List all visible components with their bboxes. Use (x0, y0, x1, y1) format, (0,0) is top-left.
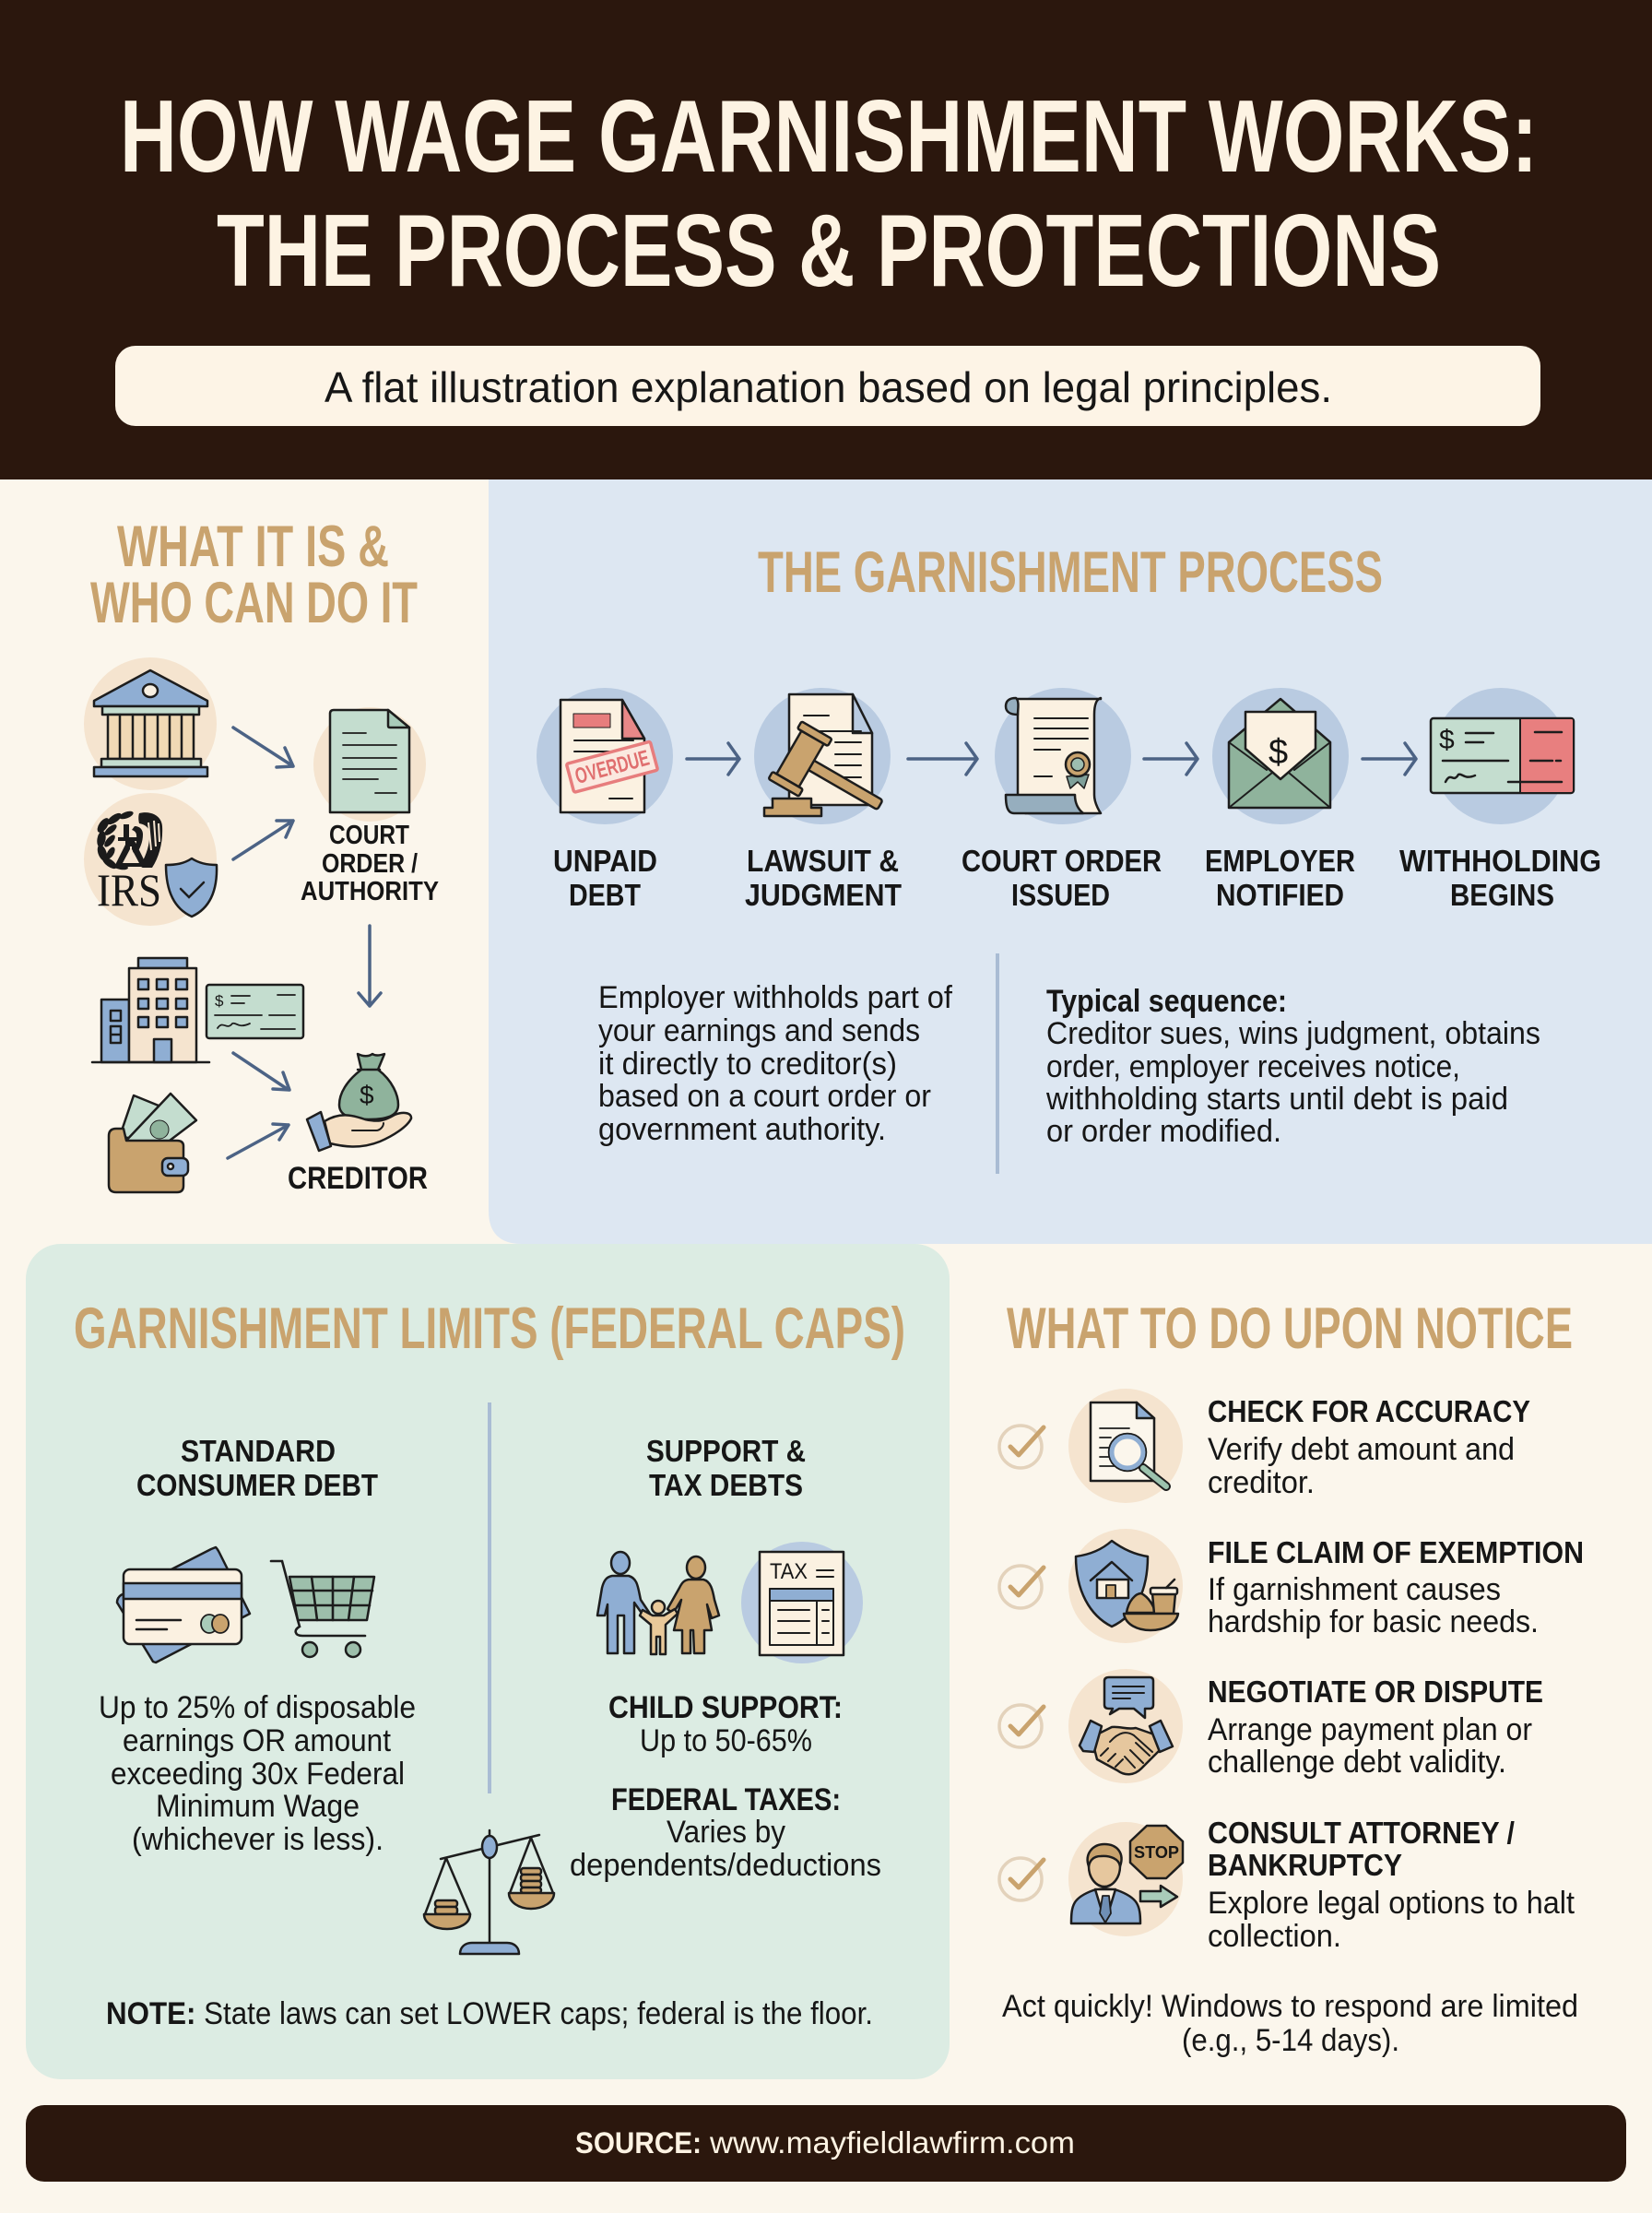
text: definition: Employer withholds part of (598, 980, 953, 1015)
icon: attorney with stop sign (1068, 1822, 1183, 1936)
icon: money bag in hand (307, 1054, 411, 1151)
label: court order / authority: AUTHORITY (301, 877, 439, 906)
icon: balance scale (424, 1830, 554, 1954)
label: court order / authority: COURT (329, 821, 409, 850)
text: child support: CHILD SUPPORT: (608, 1690, 843, 1725)
icon: IRS and shield: IRS (97, 864, 161, 916)
heading: what it is: WHO CAN DO IT (90, 571, 418, 635)
footer: source bar (26, 2105, 1626, 2182)
subtitle pill (115, 346, 1540, 426)
panel: garnishment limits (26, 1244, 950, 2079)
label: unpaid debt: DEBT (569, 878, 641, 912)
icon: paycheck withheld (1431, 688, 1574, 824)
label: unpaid debt: UNPAID (553, 844, 657, 878)
subtitle pill: A flat illustration explanation based on legal principles. (324, 363, 1332, 411)
label: support and tax debts: TAX DEBTS (649, 1468, 803, 1502)
text: check for accuracy: CHECK FOR ACCURACY (1208, 1394, 1530, 1428)
label: lawsuit and judgment: LAWSUIT & (747, 844, 899, 878)
icon: employer building (92, 958, 209, 1062)
callout: act quickly (1002, 1989, 1578, 2058)
column: standard consumer debt (99, 1434, 416, 1857)
text: definition: based on a court order or (598, 1079, 931, 1114)
text: federal taxes (570, 1782, 881, 1883)
heading: what it is (90, 515, 418, 635)
icon: overdue document (537, 688, 673, 824)
label: employer notified: EMPLOYER (1205, 844, 1355, 878)
icon: gavel and document (754, 688, 897, 834)
arrow: employer to creditor (233, 1053, 289, 1090)
text: standard limit: earnings OR amount (123, 1723, 391, 1758)
step: check for accuracy (999, 1389, 1530, 1503)
icon: check mark (999, 1858, 1044, 1900)
icon: tax form (741, 1542, 863, 1663)
arrow: order down to creditor (359, 926, 381, 1006)
heading: process: THE GARNISHMENT PROCESS (758, 540, 1383, 605)
icon: money bag in hand: $ (360, 1081, 374, 1109)
text: file claim: hardship for basic needs. (1208, 1604, 1539, 1639)
callout: act quickly: Act quickly! Windows to respond are limited (1002, 1989, 1578, 2024)
step 1: unpaid debt (537, 688, 673, 912)
icon: IRS and shield (84, 793, 217, 926)
text: consult attorney: collection. (1208, 1919, 1341, 1954)
text: child support (608, 1690, 843, 1758)
text: federal taxes: Varies by (667, 1815, 785, 1850)
label: court order issued: COURT ORDER (962, 844, 1162, 878)
icon: shopping cart (271, 1561, 374, 1657)
arrow: step 2 to 3 (908, 743, 977, 775)
text: file claim: FILE CLAIM OF EXEMPTION (1208, 1535, 1584, 1569)
label: court order issued: ISSUED (1011, 878, 1110, 912)
text: consult attorney: Explore legal options to halt (1208, 1886, 1575, 1921)
text: standard limit: exceeding 30x Federal (111, 1757, 405, 1792)
text: negotiate: Arrange payment plan or (1208, 1712, 1532, 1747)
text: standard limit (99, 1690, 416, 1857)
icon: paycheck (206, 985, 303, 1038)
text: negotiate: NEGOTIATE OR DISPUTE (1208, 1675, 1543, 1709)
text: negotiate (1208, 1675, 1543, 1780)
icon: check mark (999, 1705, 1044, 1747)
icon: paycheck: $ (215, 992, 224, 1010)
label: employer notified: NOTIFIED (1216, 878, 1344, 912)
step 5: withholding begins (1399, 688, 1601, 912)
label: withholding begins: BEGINS (1450, 878, 1554, 912)
arrow: step 4 to 5 (1363, 743, 1416, 775)
text: child support: Up to 50-65% (640, 1723, 812, 1758)
footer: source bar: SOURCE: (575, 2126, 702, 2160)
arrow: step 1 to 2 (687, 743, 739, 775)
panel: what to do upon notice (999, 1296, 1584, 2058)
label: standard consumer debt: STANDARD (181, 1434, 336, 1468)
label: standard consumer debt (136, 1434, 378, 1502)
label: support and tax debts: SUPPORT & (646, 1434, 806, 1468)
label: employer notified (1205, 844, 1355, 912)
text: standard limit: Up to 25% of disposable (99, 1690, 416, 1725)
label: support and tax debts (646, 1434, 806, 1502)
label: court order / authority (301, 821, 439, 906)
text: definition: your earnings and sends (598, 1013, 920, 1048)
text: typical sequence: order, employer receives notice, (1046, 1049, 1460, 1084)
label: creditor: CREDITOR (288, 1161, 428, 1196)
text: check for accuracy: Verify debt amount and (1208, 1432, 1515, 1467)
note: NOTE: State laws can set LOWER caps; federal is the floor. (106, 1996, 873, 2031)
icon: check mark (999, 1426, 1044, 1468)
step 3: court order issued (962, 688, 1162, 912)
text: typical sequence: withholding starts until debt is paid (1045, 1082, 1508, 1117)
step: file claim of exemption (999, 1529, 1584, 1643)
text: federal taxes: FEDERAL TAXES: (611, 1782, 841, 1817)
heading: what it is: WHAT IT IS & (117, 515, 389, 579)
icon: attorney with stop sign: STOP (1134, 1843, 1179, 1862)
icon: scroll with seal (995, 688, 1131, 824)
arrow: IRS to order (233, 821, 293, 859)
text: standard limit: (whichever is less). (132, 1822, 384, 1857)
text: definition (598, 980, 953, 1147)
label: lawsuit and judgment (745, 844, 902, 912)
label: withholding begins: WITHHOLDING (1399, 844, 1601, 878)
text: typical sequence: Creditor sues, wins judgment, obtains (1046, 1016, 1540, 1051)
text: typical sequence (1045, 984, 1540, 1149)
icon: document under magnifier (1068, 1389, 1183, 1503)
header banner (0, 0, 1652, 479)
label: withholding begins (1399, 844, 1601, 912)
text: consult attorney: CONSULT ATTORNEY / (1208, 1816, 1515, 1850)
text: typical sequence: or order modified. (1046, 1114, 1281, 1149)
arrow: court to order (233, 728, 293, 767)
footer: source bar: www.mayfieldlawfirm.com (709, 2125, 1075, 2160)
step 4: employer notified (1205, 688, 1355, 912)
panel: what it is and who can do it (84, 515, 439, 1196)
arrow: step 3 to 4 (1144, 743, 1198, 775)
icon: court order document (313, 707, 426, 822)
arrow: wallet to creditor (228, 1124, 289, 1158)
step: negotiate or dispute (999, 1669, 1543, 1783)
heading: limits: GARNISHMENT LIMITS (FEDERAL CAPS) (74, 1296, 905, 1361)
icon: family (597, 1552, 719, 1654)
text: file claim (1208, 1535, 1584, 1639)
text: negotiate: challenge debt validity. (1208, 1745, 1506, 1780)
text: check for accuracy (1208, 1394, 1530, 1500)
icon: envelope with notice (1212, 688, 1349, 824)
text: file claim: If garnishment causes (1208, 1572, 1501, 1607)
label: court order issued (962, 844, 1162, 912)
text: standard limit: Minimum Wage (156, 1789, 360, 1824)
label: unpaid debt (553, 844, 657, 912)
text: consult attorney: BANKRUPTCY (1208, 1848, 1402, 1882)
step: consult attorney (999, 1816, 1575, 1954)
icon: handshake and speech bubble (1068, 1669, 1183, 1783)
icon: wallet with cash (109, 1094, 196, 1192)
text: federal taxes: dependents/deductions (570, 1848, 881, 1883)
title (120, 79, 1538, 308)
panel: the garnishment process (489, 479, 1652, 1244)
icon: tax form: TAX (770, 1559, 808, 1584)
icon: shield, house and food (1068, 1529, 1183, 1643)
text: definition: it directly to creditor(s) (598, 1047, 897, 1082)
label: standard consumer debt: CONSUMER DEBT (136, 1468, 378, 1502)
icon: envelope with notice: $ (1268, 733, 1288, 772)
callout: act quickly: (e.g., 5-14 days). (1182, 2023, 1399, 2058)
icon: overdue document: OVERDUE (572, 746, 652, 789)
icon: check mark (999, 1566, 1044, 1608)
icon: credit cards (117, 1547, 250, 1663)
text: definition: government authority. (598, 1112, 886, 1147)
icon: paycheck withheld: $ (1439, 725, 1455, 755)
column: support and tax debts (570, 1434, 881, 1883)
label: court order / authority: ORDER / (322, 849, 418, 879)
label: lawsuit and judgment: JUDGMENT (745, 878, 902, 912)
step 2: lawsuit and judgment (745, 688, 902, 912)
text: check for accuracy: creditor. (1208, 1465, 1315, 1500)
icon: courthouse (84, 657, 217, 790)
text: consult attorney (1208, 1816, 1575, 1954)
text: typical sequence: Typical sequence: (1046, 984, 1287, 1019)
